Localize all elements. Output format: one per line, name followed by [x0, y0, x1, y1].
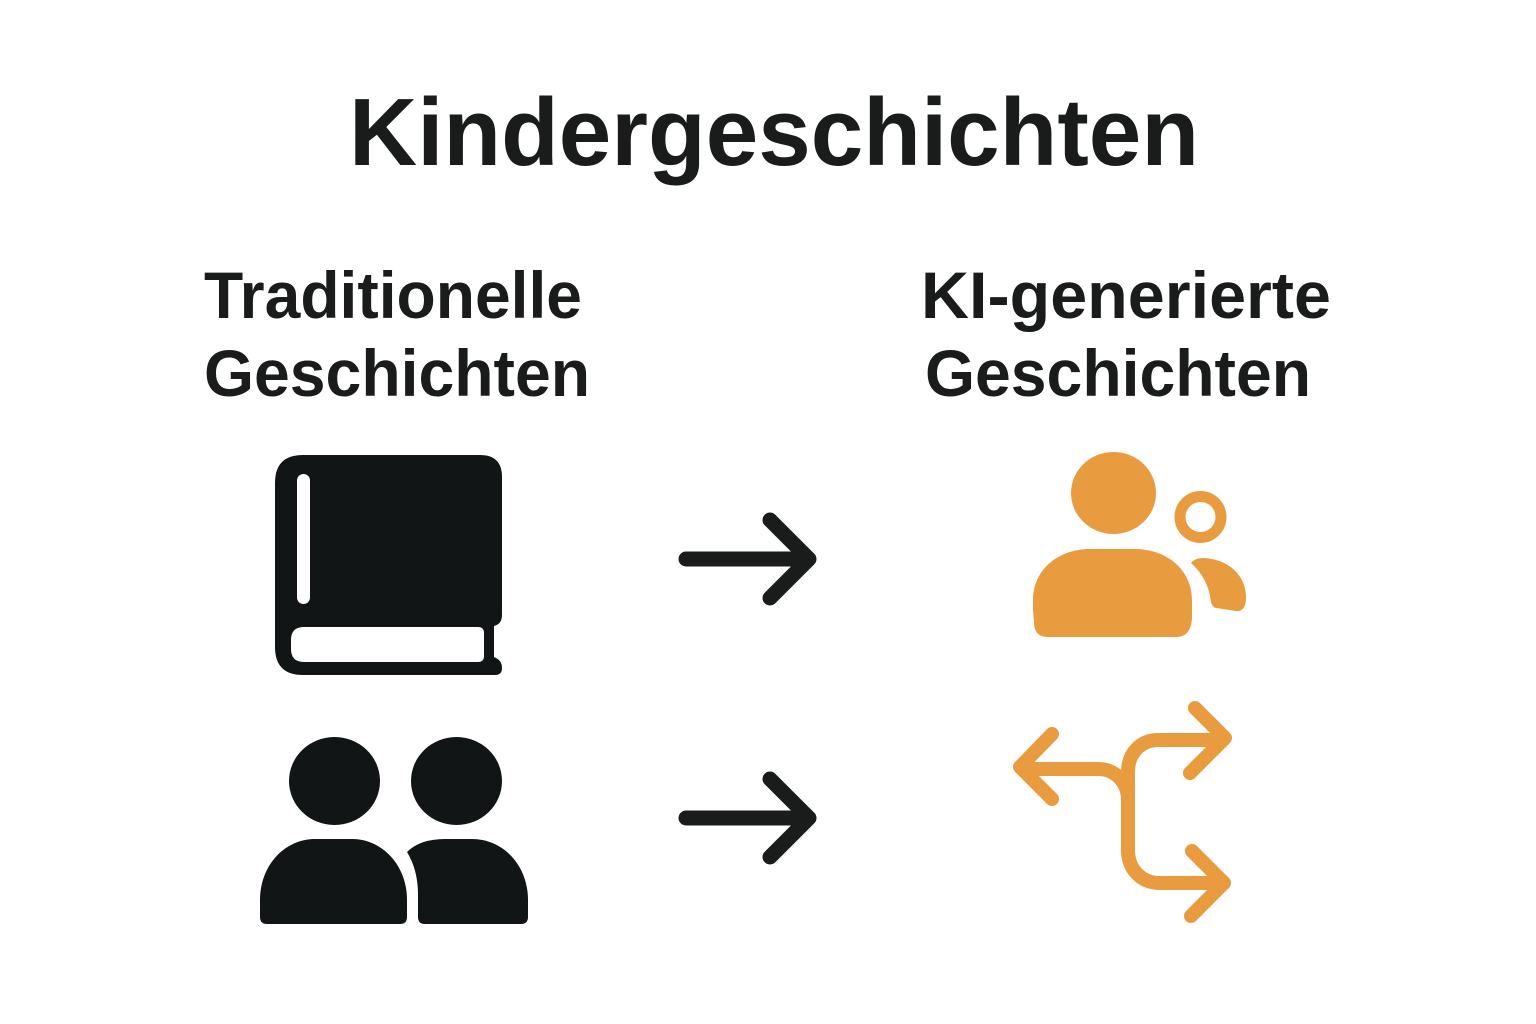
arrow: people to branching paths [686, 779, 809, 857]
heading: traditional stories: Traditionelle [204, 258, 582, 332]
arrow: book to AI person [686, 520, 809, 598]
icon: AI person with companion [1033, 452, 1246, 637]
heading: traditional stories [204, 258, 590, 410]
title: Kindergeschichten [349, 79, 1199, 186]
heading: AI-generated stories: KI-generierte [921, 258, 1331, 332]
heading: traditional stories: Geschichten [204, 336, 590, 410]
icon: branching story paths [1020, 708, 1225, 916]
icon: two people [260, 737, 528, 924]
icon: book [275, 455, 502, 675]
heading: AI-generated stories [921, 258, 1331, 410]
heading: AI-generated stories: Geschichten [925, 336, 1311, 410]
